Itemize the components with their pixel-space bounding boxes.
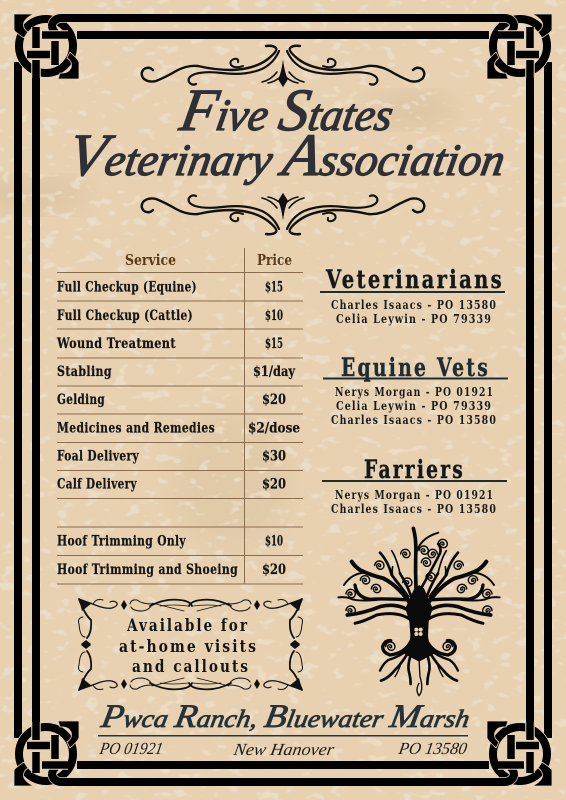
- ornate callout frame: [78, 599, 302, 690]
- prices: $20: [262, 392, 286, 408]
- service names: Medicines and Remedies: [57, 420, 215, 436]
- service names: Foal Delivery: [57, 448, 139, 464]
- callout text: [119, 616, 258, 677]
- panel: veterinarians: Charles Isaacs - PO 13580: [331, 297, 497, 312]
- icon: celtic knot top left: [14, 14, 79, 79]
- service names: Wound Treatment: [56, 336, 176, 352]
- callout: at-home visits: [78, 599, 302, 690]
- icon: celtic knot bottom left: [14, 721, 79, 786]
- prices: $2/dose: [248, 420, 300, 436]
- prices: $15: [265, 336, 283, 352]
- panel: farriers: Nerys Morgan - PO 01921: [335, 487, 494, 502]
- panel: equine vets: Charles Isaacs - PO 13580: [331, 412, 497, 427]
- footer details: PO 01921: [97, 739, 165, 758]
- table header: [125, 251, 292, 269]
- icon: celtic knot bottom right: [487, 721, 552, 786]
- service names: Full Checkup (Equine): [57, 280, 197, 296]
- panel: equine vets: Celia Leywin - PO 79339: [336, 398, 492, 413]
- prices: [248, 280, 300, 578]
- callout text: Available for: [126, 616, 249, 636]
- prices: $1/day: [253, 364, 296, 380]
- ranch name: Pwca Ranch, Bluewater Marsh: [98, 698, 473, 735]
- price table: [56, 248, 303, 584]
- bottom flourish ornament: [142, 193, 424, 234]
- prices: $15: [265, 280, 283, 296]
- service names: Full Checkup (Cattle): [57, 308, 193, 324]
- prices: $30: [262, 448, 286, 464]
- panel: equine vets: Nerys Morgan - PO 01921: [335, 384, 494, 399]
- prices: $10: [265, 534, 283, 550]
- panel: farriers: [322, 455, 507, 516]
- prices: $20: [262, 562, 286, 578]
- footer details: New Hanover: [231, 740, 336, 759]
- title: Five States: [175, 77, 399, 144]
- service names: Calf Delivery: [57, 476, 137, 492]
- panel: veterinarians: [320, 265, 505, 326]
- prices: $20: [262, 476, 286, 492]
- panel: veterinarians: Celia Leywin - PO 79339: [336, 311, 492, 326]
- title: Veterinary Association: [64, 122, 511, 189]
- table header: Service: [125, 251, 176, 269]
- service names: Hoof Trimming and Shoeing: [57, 562, 238, 578]
- panel: veterinarians: Veterinarians: [325, 265, 504, 294]
- service names: Gelding: [57, 392, 105, 408]
- footer details: [97, 739, 469, 759]
- address footer: [97, 698, 473, 759]
- panel: farriers: Farriers: [364, 455, 465, 484]
- top flourish ornament: [142, 46, 424, 87]
- service names: Stabling: [57, 364, 112, 380]
- prices: $10: [265, 308, 283, 324]
- panel: equine vets: [323, 353, 508, 427]
- panel: equine vets: Equine Vets: [341, 353, 490, 382]
- callout text: and callouts: [132, 657, 250, 677]
- callout text: at-home visits: [119, 637, 258, 657]
- icon: celtic knot top right: [487, 14, 552, 79]
- footer details: PO 13580: [396, 739, 469, 758]
- icon: tree of life: [338, 528, 500, 696]
- service names: [56, 280, 238, 578]
- service names: Hoof Trimming Only: [57, 534, 186, 550]
- panel: farriers: Charles Isaacs - PO 13580: [331, 501, 497, 516]
- title: [64, 77, 511, 189]
- table header: Price: [257, 251, 292, 269]
